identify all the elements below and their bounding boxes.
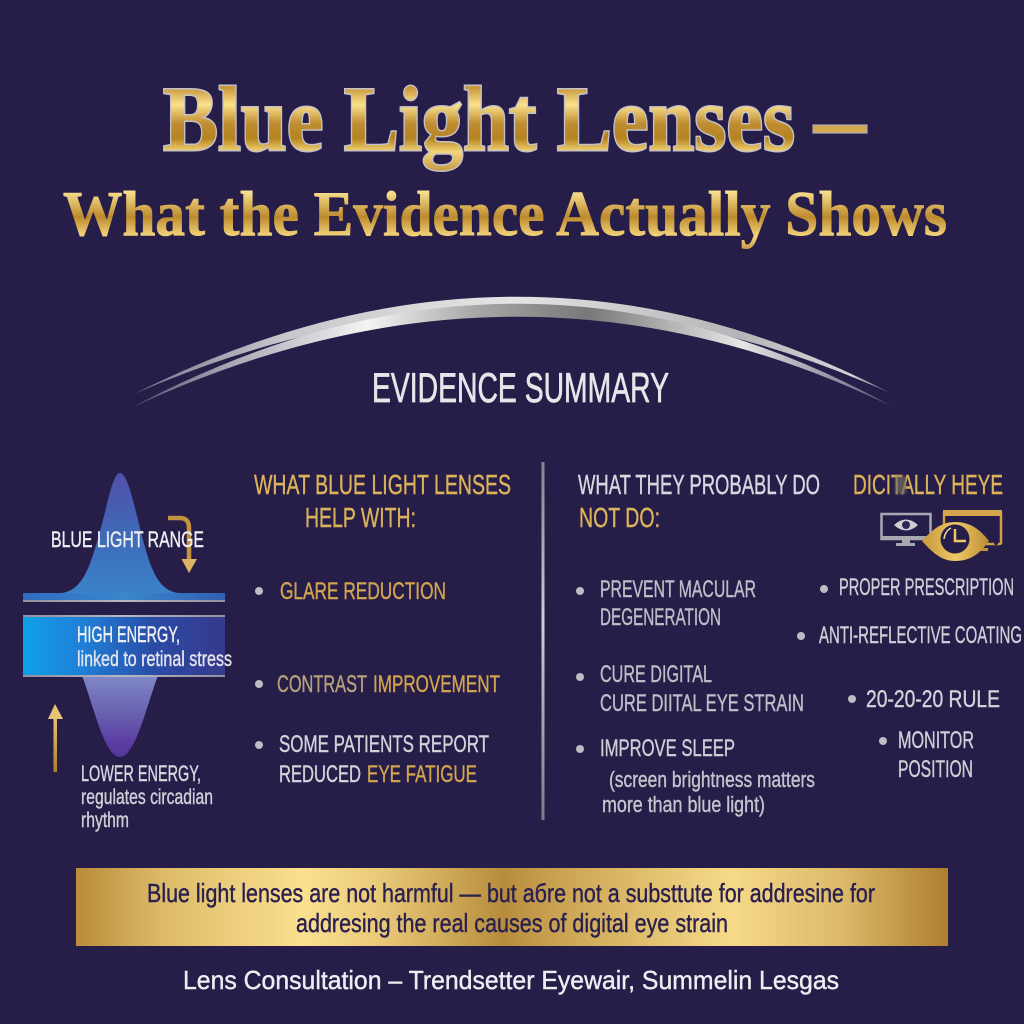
- heading: HELP WITH:: [305, 502, 416, 533]
- panel: what lenses help with: [254, 469, 511, 788]
- label: lower energy: regulates circadian: [81, 786, 213, 809]
- upper band: [23, 593, 225, 600]
- item: reduced eye fatigue: REDUCED: [279, 761, 361, 788]
- label: lower energy: rhythm: [81, 809, 129, 832]
- item: improve sleep: more than blue light): [602, 792, 765, 817]
- item: prevent macular degeneration: DEGENERATION: [600, 604, 721, 631]
- silver arc: [131, 297, 893, 408]
- item: improve sleep: IMPROVE SLEEP: [600, 735, 735, 762]
- title: [63, 68, 947, 249]
- item: monitor position: [879, 727, 974, 783]
- label: lower energy: LOWER ENERGY,: [81, 761, 201, 786]
- high energy band: [23, 616, 225, 676]
- heading: [254, 469, 511, 533]
- item: monitor position: MONITOR: [898, 727, 974, 754]
- arrow: curved gold down: [168, 518, 197, 573]
- label: high energy: HIGH ENERGY,: [77, 622, 180, 647]
- label: high energy: linked to retinal stress: [77, 648, 232, 671]
- heading: NOT DO:: [579, 502, 660, 533]
- panel: what they probably do not do: [576, 469, 820, 817]
- heading: [578, 469, 820, 533]
- callout banner: addresing the real causes of digital eye strain: [296, 908, 728, 938]
- icon: gold eye with clock: [922, 522, 989, 561]
- item: improve sleep: (screen brightness matters: [609, 767, 815, 792]
- label: high energy: [77, 622, 232, 671]
- item: cure digital eye strain: [576, 661, 804, 717]
- heading: WHAT THEY PROBABLY DO: [578, 469, 820, 500]
- item: reduced eye fatigue: SOME PATIENTS REPORT: [279, 731, 489, 758]
- divider: [542, 462, 544, 820]
- upper bell curve: [60, 473, 180, 593]
- footer: Lens Consultation – Trendsetter Eyewair, Summelin Lesgas: [183, 965, 839, 995]
- item: contrast improvement: CONTRAST: [277, 671, 367, 698]
- title: Blue Light Lenses: [163, 68, 795, 170]
- item: contrast improvement: IMPROVEMENT: [373, 671, 500, 698]
- item: prevent macular degeneration: [576, 576, 756, 631]
- item: prevent macular degeneration: PREVENT MACULAR: [600, 576, 756, 603]
- arrow: gold up: [48, 704, 63, 772]
- item: improve sleep: [576, 735, 815, 817]
- callout banner: [76, 868, 948, 946]
- label: lower energy: [81, 761, 213, 832]
- item: reduced eye fatigue: EYE FATIGUE: [367, 761, 477, 788]
- callout banner: Blue light lenses are not harmful — but aбre not a substtute for addresine for: [147, 878, 875, 908]
- lower bell curve: [82, 676, 158, 757]
- item: reduced eye fatigue: [255, 731, 489, 788]
- item: monitor position: POSITION: [898, 756, 973, 783]
- icon: monitor and eye with clock: [881, 510, 1002, 561]
- icon: gold screen: [943, 510, 1002, 551]
- title: What the Evidence Actually Shows: [63, 178, 947, 249]
- item: glare reduction: [255, 578, 446, 605]
- item: cure digital eye strain: CURE DIGITAL: [600, 661, 712, 688]
- heading: WHAT BLUE LIGHT LENSES: [254, 469, 511, 500]
- heading: evidence summary: EVIDENCE SUMMARY: [372, 364, 669, 411]
- panel: digital eye solutions: [797, 469, 1022, 783]
- item: glare reduction: GLARE REDUCTION: [280, 578, 446, 605]
- item: contrast improvement: [255, 671, 500, 698]
- label: blue light range: BLUE LIGHT RANGE: [51, 527, 204, 552]
- panel: blue light spectrum diagram: [23, 473, 232, 832]
- item: cure digital eye strain: CURE DIITAL EYE STRAIN: [600, 690, 804, 717]
- icon: silver monitor: [881, 514, 931, 546]
